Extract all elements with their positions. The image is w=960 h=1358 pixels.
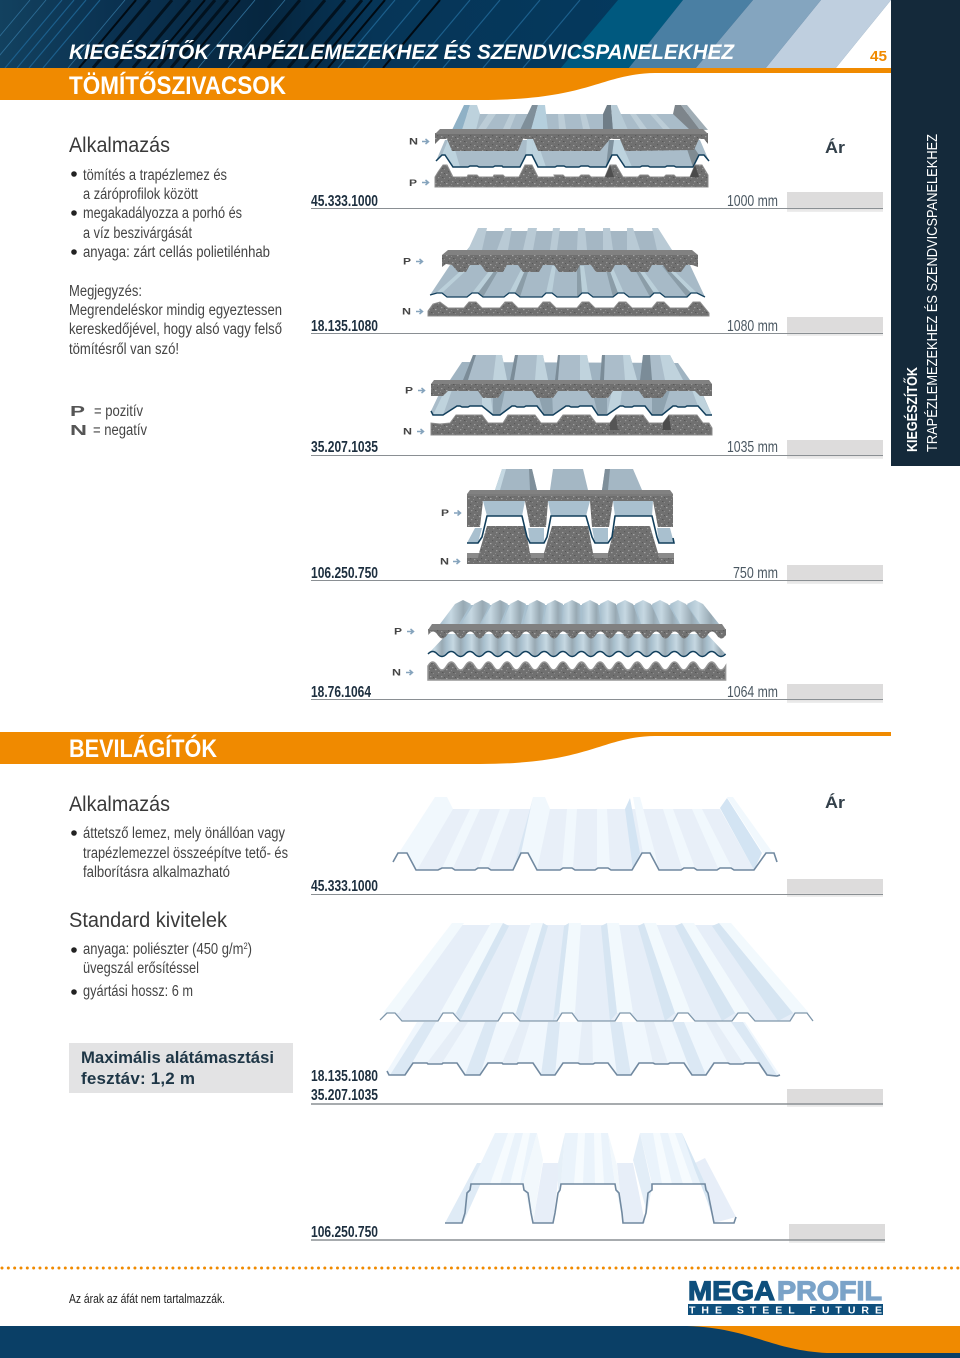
side tab: KIEGÉSZÍTŐK: [903, 367, 921, 452]
text block: standard kivitelek: üvegszál erősítéssel: [83, 960, 199, 977]
text block: standard kivitelek: Standard kivitelek: [69, 909, 227, 932]
label: N 45.333: [409, 136, 428, 146]
label: P 106.250: P: [441, 508, 449, 518]
side tab: TRAPÉZLEMEZEKHEZ ÉS SZENDVICSPANELEKHEZ: [924, 134, 941, 452]
orange band: tömítőszivacsok: [0, 68, 891, 100]
illustration: 35.207 foam set: [431, 355, 712, 435]
product row: 45.333.1000 foam: 45.333.1000: [311, 193, 378, 210]
product row: 18.135.1080 foam: 1080 mm: [727, 318, 778, 335]
label: N 18.76: [392, 668, 412, 678]
product row: 35.207.1035 foam: 35.207.1035: [311, 439, 378, 456]
text block: alkalmazás (foam): anyaga: zárt cellás polietilénhab: [83, 244, 270, 261]
header banner: [0, 0, 891, 69]
label: P 45.333: P: [409, 178, 417, 188]
footer band: [0, 1326, 960, 1358]
footnote: Az árak az áfát nem tartalmazzák.: [69, 1292, 225, 1306]
product row: 106.250.750 foam: 106.250.750: [311, 565, 378, 582]
label: P 35.207: [405, 386, 424, 396]
legend: P and N: = pozitív: [94, 403, 143, 420]
product row: 18.76.1064 foam: 1064 mm: [727, 684, 778, 701]
text block: alkalmazás (foam): megakadályozza a porhó és: [83, 205, 242, 222]
text block: megjegyzés: Megrendeléskor mindig egyeztessen: [69, 302, 282, 319]
product row: 35.207.1035 foam: [311, 439, 883, 459]
label: P 35.207: P: [405, 386, 413, 396]
text block: standard kivitelek: gyártási hossz: 6 m: [83, 983, 193, 1000]
text block: alkalmazás (skylights): áttetsző lemez, mely önállóan vagy: [83, 825, 285, 842]
text block: alkalmazás (foam): a víz beszivárgását: [83, 225, 193, 242]
illustration: 106.250 foam set: [467, 469, 674, 564]
product row: 106.250.750 foam: 750 mm: [733, 565, 778, 582]
label: P 45.333: [409, 178, 428, 188]
product row: 106.250.750 skylight: [311, 1224, 885, 1243]
legend: P and N: [70, 403, 147, 439]
illustration: translucent sheet 106.250: [445, 1133, 736, 1223]
main title: KIEGÉSZÍTŐK TRAPÉZLEMEZEKHEZ ÉS SZENDVICSPANELEKHEZ: [69, 41, 735, 64]
label: N 18.76: N: [392, 668, 401, 678]
text block: alkalmazás (skylights): [69, 793, 288, 881]
section heading: bevilágítók: BEVILÁGÍTÓK: [69, 733, 217, 763]
illustration: 18.135 foam set: [428, 228, 709, 316]
label: P 18.135: P: [403, 256, 411, 266]
label: N 35.207: [403, 426, 424, 436]
text block: alkalmazás (foam): tömítés a trapézlemez és: [83, 167, 227, 184]
price column heading: skylights: Ár: [825, 793, 845, 812]
illustration: translucent sheet 35.207: [387, 1022, 780, 1076]
product row: 18.135.1080 foam: [311, 317, 883, 336]
text block: standard kivitelek: anyaga: poliészter (450 g/m: [83, 941, 274, 958]
logo: Megaprofil: [688, 1276, 883, 1316]
product row: 18.135.1080 foam: 18.135.1080: [311, 318, 378, 335]
orange band: bevilágítók: [0, 732, 891, 764]
text block: alkalmazás (skylights): Alkalmazás: [69, 793, 170, 816]
legend: P and N: P: [70, 403, 85, 420]
label: P 18.76: P: [394, 626, 402, 636]
label: N 106.250: [440, 556, 460, 566]
product row: 106.250.750 foam: [311, 565, 883, 584]
illustration: translucent sheet 18.135: [380, 923, 813, 1021]
illustration: 18.76 foam set: [428, 600, 726, 680]
text block: alkalmazás (foam): Alkalmazás: [69, 134, 170, 157]
logo: Megaprofil: THE STEEL FUTURE: [689, 1304, 882, 1316]
label: P 18.76: [394, 626, 414, 636]
label: N 18.135: N: [402, 306, 411, 316]
label: P 106.250: [441, 508, 460, 518]
text block: standard kivitelek: [69, 909, 252, 1000]
product row: 45.333.1000 skylight: 45.333.1000: [311, 878, 378, 895]
callout: maximum support span: Maximális alátámasztási: [81, 1048, 274, 1067]
illustration: 45.333 foam set: [435, 105, 709, 187]
label: N 35.207: N: [403, 426, 412, 436]
illustration: translucent sheet 45.333: [393, 797, 777, 870]
label: N 106.250: N: [440, 556, 449, 566]
product row: 18.135.1080 and 35.207.1035 skylight: 18.135.1080: [311, 1068, 378, 1085]
page number: 45: [870, 48, 887, 65]
section heading: tömítőszivacsok: TÖMÍTŐSZIVACSOK: [69, 71, 286, 100]
product row: 18.76.1064 foam: 18.76.1064: [311, 684, 371, 701]
callout: maximum support span: [69, 1043, 293, 1093]
text block: standard kivitelek: 2: [243, 941, 248, 951]
legend: P and N: = negatív: [93, 422, 147, 439]
product row: 45.333.1000 foam: [311, 192, 883, 212]
logo: Megaprofil: PROFIL: [777, 1276, 882, 1306]
label: P 18.135: [403, 256, 422, 266]
text block: megjegyzés: Megjegyzés:: [69, 283, 142, 300]
legend: P and N: N: [70, 422, 87, 439]
text block: standard kivitelek: ): [248, 941, 252, 958]
label: N 18.135: [402, 306, 422, 316]
text block: alkalmazás (skylights): falborításra alkalmazható: [83, 864, 230, 881]
label: N 45.333: N: [409, 136, 418, 146]
product row: 106.250.750 skylight: 106.250.750: [311, 1224, 378, 1241]
side tab: [891, 0, 960, 466]
text block: alkalmazás (skylights): trapézlemezzel összeépítve tető- és: [83, 845, 288, 862]
text block: megjegyzés: [69, 283, 282, 358]
text block: megjegyzés: kereskedőjével, hogy alsó vagy felső: [69, 321, 282, 338]
dotted divider: [2, 1266, 960, 1270]
text block: megjegyzés: tömítésről van szó!: [69, 341, 179, 358]
product row: 18.135.1080 and 35.207.1035 skylight: 35.207.1035: [311, 1087, 378, 1104]
product row: 18.76.1064 foam: [311, 684, 883, 703]
product row: 45.333.1000 skylight: [311, 878, 883, 897]
text block: alkalmazás (foam): [69, 134, 270, 261]
text block: alkalmazás (foam): a záróprofilok között: [83, 186, 199, 203]
product row: 18.135.1080 and 35.207.1035 skylight: [311, 1068, 883, 1107]
product row: 45.333.1000 foam: 1000 mm: [727, 193, 778, 210]
product row: 35.207.1035 foam: 1035 mm: [727, 439, 778, 456]
price column heading: foam: Ár: [825, 138, 845, 157]
callout: maximum support span: fesztáv: 1,2 m: [81, 1069, 195, 1088]
logo: Megaprofil: MEGA: [688, 1276, 775, 1306]
